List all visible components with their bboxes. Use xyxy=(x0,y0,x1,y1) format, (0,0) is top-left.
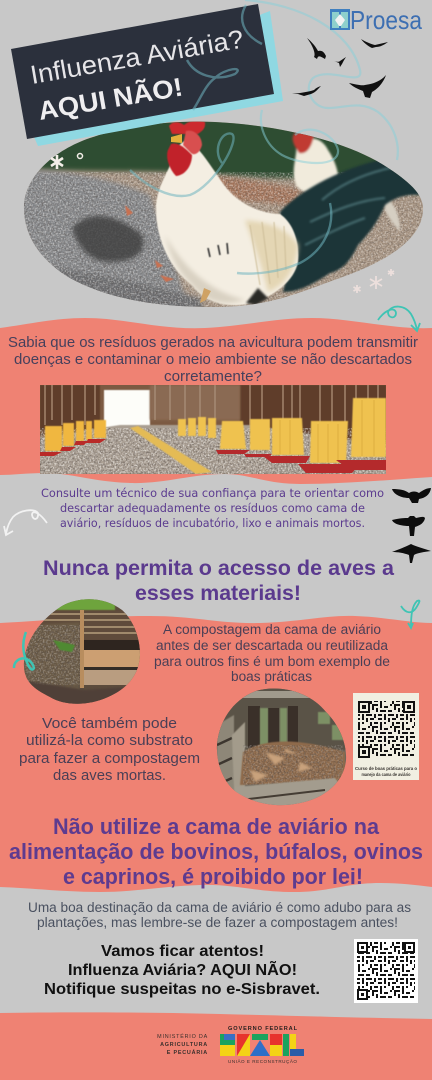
lower darker gravel xyxy=(54,266,205,307)
substrate text: para fazer a compostagem xyxy=(19,751,200,767)
decorative stars lower right xyxy=(354,269,394,293)
ground xyxy=(28,680,126,704)
feeders right xyxy=(178,398,386,463)
question text: Sabia que os resíduos gerados na avicultura podem transmitir xyxy=(8,334,418,351)
heading: prohibited by law: Não utilize a cama de aviário na xyxy=(53,814,380,839)
title line 1: Influenza Aviária? xyxy=(28,24,246,90)
legs xyxy=(200,288,211,303)
icon: white curly arrow xyxy=(4,510,47,535)
government logo xyxy=(220,1026,304,1064)
QR code: e-Sisbravet xyxy=(354,939,418,1003)
star xyxy=(51,155,63,169)
substrate text: utilizá-la como substrato xyxy=(26,733,193,749)
heading: prohibited by law: alimentação de bovinos, búfalos, ovinos xyxy=(9,839,423,864)
silhouette 2 xyxy=(392,516,425,536)
consult text: descartar adequadamente os resíduos como cama de xyxy=(60,501,365,515)
squiggle over banner and photo xyxy=(130,5,331,274)
wall stripes xyxy=(40,385,386,440)
logo icon xyxy=(330,9,350,30)
bird 4 xyxy=(292,86,321,96)
government label: GOVERNO FEDERAL xyxy=(228,1026,298,1032)
bird 5 xyxy=(349,75,386,98)
background rooster xyxy=(293,132,339,193)
feeders left xyxy=(45,420,106,451)
comb xyxy=(169,121,205,134)
QR card xyxy=(354,939,418,1003)
fertilizer text: Uma boa destinação da cama de aviário é como adubo para as xyxy=(28,900,411,915)
foliage xyxy=(56,599,116,610)
ground speckle xyxy=(20,172,430,312)
consult text xyxy=(41,486,384,530)
bright door xyxy=(104,390,150,430)
QR caption xyxy=(355,766,417,777)
icon: teal loop right xyxy=(401,601,420,628)
call to action: Influenza Aviária? AQUI NÃO! xyxy=(68,959,297,979)
rooster body xyxy=(156,140,298,305)
photo: compost crate xyxy=(216,688,346,806)
leaf speckle xyxy=(243,745,343,785)
photo: compost bin wood xyxy=(24,599,140,704)
question text xyxy=(8,334,418,385)
beak xyxy=(171,134,182,143)
QR card xyxy=(353,693,419,780)
silhouette 1 xyxy=(392,488,431,503)
banner shadow xyxy=(34,11,283,146)
heading: prohibited by law xyxy=(9,814,423,889)
compost heap xyxy=(20,622,80,690)
icon: teal sprig xyxy=(14,632,34,670)
compost text: antes de ser descartada ou reutilizada xyxy=(156,638,388,653)
icon: bird silhouettes xyxy=(392,488,431,563)
front boards xyxy=(236,778,338,806)
tail feathers xyxy=(280,157,428,292)
fertilizer text xyxy=(28,900,411,930)
QR modules xyxy=(357,942,415,1000)
photo: poultry house xyxy=(40,385,386,474)
QR finders xyxy=(359,702,414,757)
panel: salmon footer xyxy=(0,1012,432,1080)
leaf pile xyxy=(240,742,345,785)
dark gap xyxy=(84,640,140,650)
feeder trays right xyxy=(216,450,386,473)
left crate slats xyxy=(217,715,234,790)
ministry logo text: AGRICULTURA xyxy=(160,1042,208,1048)
compost speckle xyxy=(24,625,80,704)
consult text: aviário, resíduos de incubatório, lixo e animais mortos. xyxy=(60,516,365,530)
title banner xyxy=(11,4,283,146)
ministry logo text xyxy=(157,1033,208,1056)
Brasil mark xyxy=(220,1034,304,1056)
logo text: Proesa xyxy=(350,5,422,35)
substrate text: Você também pode xyxy=(42,716,177,732)
question text: doenças e contaminar o meio ambiente se não descartados xyxy=(14,351,412,368)
QR finder centers xyxy=(362,705,411,754)
feeder ribs xyxy=(280,400,374,462)
litter floor xyxy=(40,425,386,474)
feather shading xyxy=(245,220,298,292)
panel: salmon band composting xyxy=(0,616,432,892)
banner plate xyxy=(11,4,274,139)
dot xyxy=(78,154,82,158)
compost text: para outros fins é um bom exemplo de xyxy=(154,654,390,669)
ministry logo text: MINISTÉRIO DA xyxy=(157,1033,208,1040)
QR code: poultry litter course xyxy=(353,693,419,780)
QR finder centers xyxy=(361,946,411,996)
QR caption: Curso de boas práticas para o xyxy=(355,766,417,771)
decorative asterisk left xyxy=(51,154,82,169)
substrate text xyxy=(19,716,200,784)
photo: rooster xyxy=(20,118,430,313)
heading: never allow access xyxy=(43,556,395,605)
compost text xyxy=(154,622,390,684)
fallen leaves xyxy=(125,205,174,282)
heading: never allow access: Nunca permita o acesso de aves a xyxy=(43,556,395,580)
QR caption: manejo da cama de aviário xyxy=(362,772,411,777)
government tagline: UNIÃO E RECONSTRUÇÃO xyxy=(228,1058,297,1064)
feed line xyxy=(130,426,212,474)
wood planks xyxy=(84,650,140,667)
litter speckle xyxy=(40,428,386,474)
bird 3 xyxy=(334,57,346,67)
gravel dark patch xyxy=(72,216,143,262)
title line 2: AQUI NÃO! xyxy=(36,71,185,126)
panel: salmon band with waste question xyxy=(0,318,432,484)
belly shading xyxy=(165,235,245,303)
fertilizer text: plantações, mas lembre-se de fazer a compostagem antes! xyxy=(37,915,398,930)
bird 1 xyxy=(307,38,326,59)
Proesa logo xyxy=(330,5,422,35)
compost text: boas práticas xyxy=(231,669,312,684)
orange blurred band xyxy=(217,174,300,206)
silhouette 3 xyxy=(392,544,431,563)
back fence xyxy=(40,610,140,640)
QR modules xyxy=(358,701,415,758)
bird 2 xyxy=(361,39,388,48)
call to action xyxy=(44,943,320,998)
photo background: foliage xyxy=(20,118,430,195)
call to action: Notifique suspeitas no e-Sisbravet. xyxy=(44,981,320,998)
feeder trays left xyxy=(40,439,106,456)
heading: prohibited by law: e caprinos, é proibido por lei! xyxy=(63,864,363,889)
call to action: Vamos ficar atentos! xyxy=(101,943,264,960)
face and wattle xyxy=(183,131,202,154)
post xyxy=(80,610,84,688)
compost text: A compostagem da cama de aviário xyxy=(163,622,381,637)
substrate text: das aves mortas. xyxy=(53,768,166,784)
heading: never allow access: esses materiais! xyxy=(135,581,301,605)
background rooster legs xyxy=(384,201,401,232)
question text: corretamente? xyxy=(164,368,262,385)
ministry logo text: E PECUÁRIA xyxy=(167,1049,208,1056)
consult text: Consulte um técnico de sua confiança para te orientar como xyxy=(41,486,384,500)
icon: teal curly arrow xyxy=(378,307,420,331)
icon: flying birds xyxy=(292,38,388,98)
QR finders xyxy=(358,943,414,999)
back slats xyxy=(215,685,350,750)
squiggle decorative line xyxy=(245,0,398,163)
photo ground: gravel xyxy=(20,170,190,310)
